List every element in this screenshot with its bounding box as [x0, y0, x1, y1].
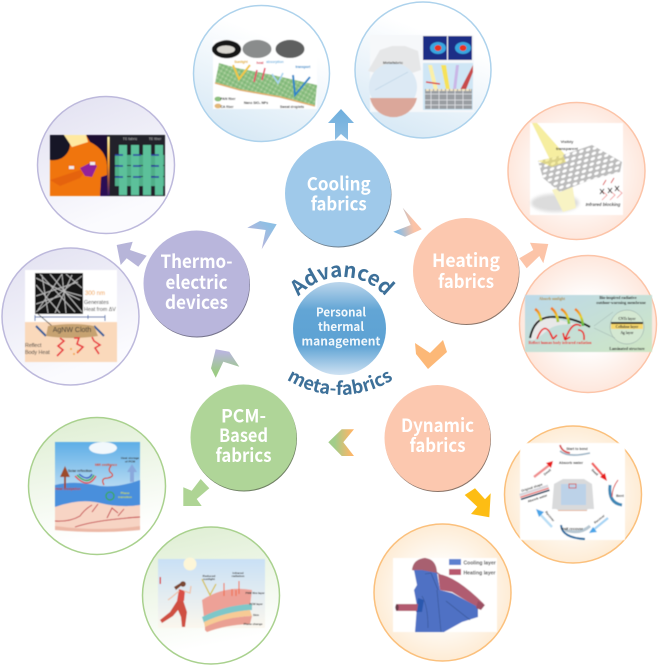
node: heating fabrics: Heating: [432, 247, 500, 273]
panel: PCM-based fabrics image 1: Phase: [121, 491, 130, 495]
chevron: PCM to thermoelectric: [211, 349, 239, 378]
centre: personal thermal management: [293, 282, 386, 375]
node: PCM-based fabrics: PCM-: [221, 403, 266, 429]
panel: cooling fabrics image 1: heat: [257, 61, 264, 65]
panel: heating fabrics image 2: Absorb sunlight: [539, 297, 566, 301]
chevron: dynamic to PCM: [328, 429, 354, 456]
panel: cooling fabrics image 1: PAN fiber: [220, 97, 236, 101]
node: dynamic fabrics: fabrics: [410, 432, 466, 458]
panel: PCM-based fabrics image 1: Solar reflection: [68, 469, 92, 473]
panel: PCM-based fabrics image 2: PCM layer: [249, 602, 264, 606]
panel: thermoelectric devices image 1: [38, 96, 174, 234]
panel: heating fabrics image 1: Infrared blocking: [586, 202, 621, 207]
panel: thermoelectric devices image 2: Heat from ΔV: [84, 307, 116, 313]
panel: thermoelectric devices image 1: TE fabric: [123, 137, 137, 141]
centre: personal thermal management: thermal: [318, 318, 364, 335]
panel: PCM-based fabrics image 2: PNM film layer: [245, 591, 266, 595]
panel: thermoelectric devices image 2: Generates: [84, 300, 109, 306]
panel: heating fabrics image 2: CNTs layer: [618, 317, 636, 321]
panel: cooling fabrics image 1: Sweat droplets: [280, 105, 304, 109]
panel: PCM-based fabrics image 2: radiation: [232, 574, 244, 578]
panel: dynamic fabrics image 1: Original shape: [521, 482, 543, 493]
panel: thermoelectric devices image 2: Body Heat: [25, 350, 50, 356]
node: cooling fabrics: fabrics: [311, 191, 367, 217]
node: heating fabrics: [413, 218, 520, 325]
node: cooling fabrics: [285, 140, 392, 248]
panel: cooling fabrics image 1: CA fiber: [220, 105, 234, 109]
arrow: thermoelectric to images: [117, 242, 147, 267]
panel: thermoelectric devices image 2: AgNW Cloth: [53, 327, 91, 334]
centre: personal thermal management: Personal: [316, 304, 366, 321]
chevron: thermoelectric to cooling: [247, 221, 277, 249]
panel: heating fabrics image 2: outdoor-warming membrane: [596, 300, 646, 305]
panel: PCM-based fabrics image 1: Heat storage: [121, 456, 139, 460]
arrow: cooling to images: [328, 109, 354, 140]
panel: dynamic fabrics image 1: Half recover: [561, 527, 583, 531]
node: dynamic fabrics: Dynamic: [401, 412, 474, 438]
panel: thermoelectric devices image 2: Reflect: [25, 343, 42, 349]
panel: heating fabrics image 2: Ag layer: [620, 331, 634, 335]
panel: PCM-based fabrics image 1: [28, 418, 166, 554]
curved title: meta-fabrics: meta-fabrics: [288, 372, 392, 395]
panel: heating fabrics image 1: transparent: [556, 146, 579, 151]
panel: heating fabrics image 2: [520, 256, 656, 392]
panel: cooling fabrics image 2: [355, 2, 491, 138]
panel: dynamic fabrics image 2: [374, 524, 511, 661]
panel: heating fabrics image 2: Bio-inspired radiative: [599, 295, 637, 300]
node: thermoelectric devices: [144, 230, 250, 338]
panel: cooling fabrics image 1: transport: [296, 65, 311, 69]
node: thermoelectric devices: Thermo-: [160, 248, 232, 274]
chevron: heating to dynamic: [415, 340, 447, 369]
panel: PCM-based fabrics image 2: Phase change: [244, 622, 263, 626]
panel: PCM-based fabrics image 2: sunlight: [203, 577, 215, 581]
panel: heating fabrics image 2: Laminated structure: [609, 346, 645, 351]
centre: personal thermal management: management: [302, 333, 380, 350]
panel: heating fabrics image 2: Cellulose layer: [616, 325, 639, 329]
node: PCM-based fabrics: fabrics: [216, 442, 272, 468]
panel: thermoelectric devices image 2: 300 nm: [85, 291, 105, 297]
panel: dynamic fabrics image 1: Bent: [616, 494, 625, 498]
node: PCM-based fabrics: [190, 384, 297, 492]
chevron: cooling to heating: [393, 208, 422, 237]
panel: PCM-based fabrics image 2: Reduced: [203, 574, 216, 578]
panel: dynamic fabrics image 1: [504, 426, 642, 563]
arrow: heating to images: [519, 243, 548, 268]
panel: cooling fabrics image 1: Sunlight: [234, 60, 249, 64]
panel: dynamic fabrics image 1: Recover: [544, 510, 556, 523]
panel: dynamic fabrics image 2: Cooling layer: [464, 560, 496, 566]
panel: dynamic fabrics image 1: Absorb water: [527, 493, 549, 503]
panel: heating fabrics image 1: Visibly: [561, 139, 574, 144]
panel: PCM-based fabrics image 2: Skin: [253, 613, 259, 617]
arrow: PCM to images: [183, 479, 209, 506]
panel: thermoelectric devices image 1: TE fiber: [149, 137, 162, 141]
arrow: dynamic to images: [465, 488, 491, 517]
panel: cooling fabrics image 1: Nano SiO₂ NPs: [244, 101, 268, 105]
panel: dynamic fabrics image 1: Recover: [593, 513, 606, 525]
panel: thermoelectric devices image 2: [2, 248, 139, 385]
panel: PCM-based fabrics image 2: [142, 527, 280, 664]
node: heating fabrics: fabrics: [438, 268, 494, 294]
panel: cooling fabrics image 1: absorption: [266, 60, 284, 64]
panel: cooling fabrics image 1: [194, 6, 330, 142]
panel: cooling fabrics image 2: Metafabric: [383, 60, 404, 65]
panel: dynamic fabrics image 2: Heating layer: [464, 570, 496, 576]
node: dynamic fabrics: [384, 385, 491, 492]
panel: dynamic fabrics image 1: Absorb water: [559, 461, 584, 465]
panel: PCM-based fabrics image 1: transition: [118, 495, 132, 499]
curved title: Advanced: Advanced: [292, 265, 396, 296]
panel: dynamic fabrics image 1: Start to bend: [566, 447, 588, 451]
node: thermoelectric devices: devices: [165, 289, 228, 315]
panel: PCM-based fabrics image 1: MIR emittance: [95, 463, 117, 467]
panel: heating fabrics image 2: Reflect human body infrared radiation: [528, 341, 592, 345]
panel: dynamic fabrics image 1: Swell: [590, 468, 599, 477]
panel: PCM-based fabrics image 1: Heat dissipation: [55, 487, 81, 491]
panel: PCM-based fabrics image 1: of PCM: [125, 460, 136, 464]
node: cooling fabrics: Cooling: [307, 171, 371, 197]
node: PCM-based fabrics: Based: [219, 422, 268, 448]
panel: PCM-based fabrics image 2: Infrared: [232, 571, 244, 575]
panel: dynamic fabrics image 1: Dwell: [543, 468, 552, 476]
panel: heating fabrics image 1: [508, 102, 645, 240]
node: thermoelectric devices: electric: [166, 269, 228, 295]
